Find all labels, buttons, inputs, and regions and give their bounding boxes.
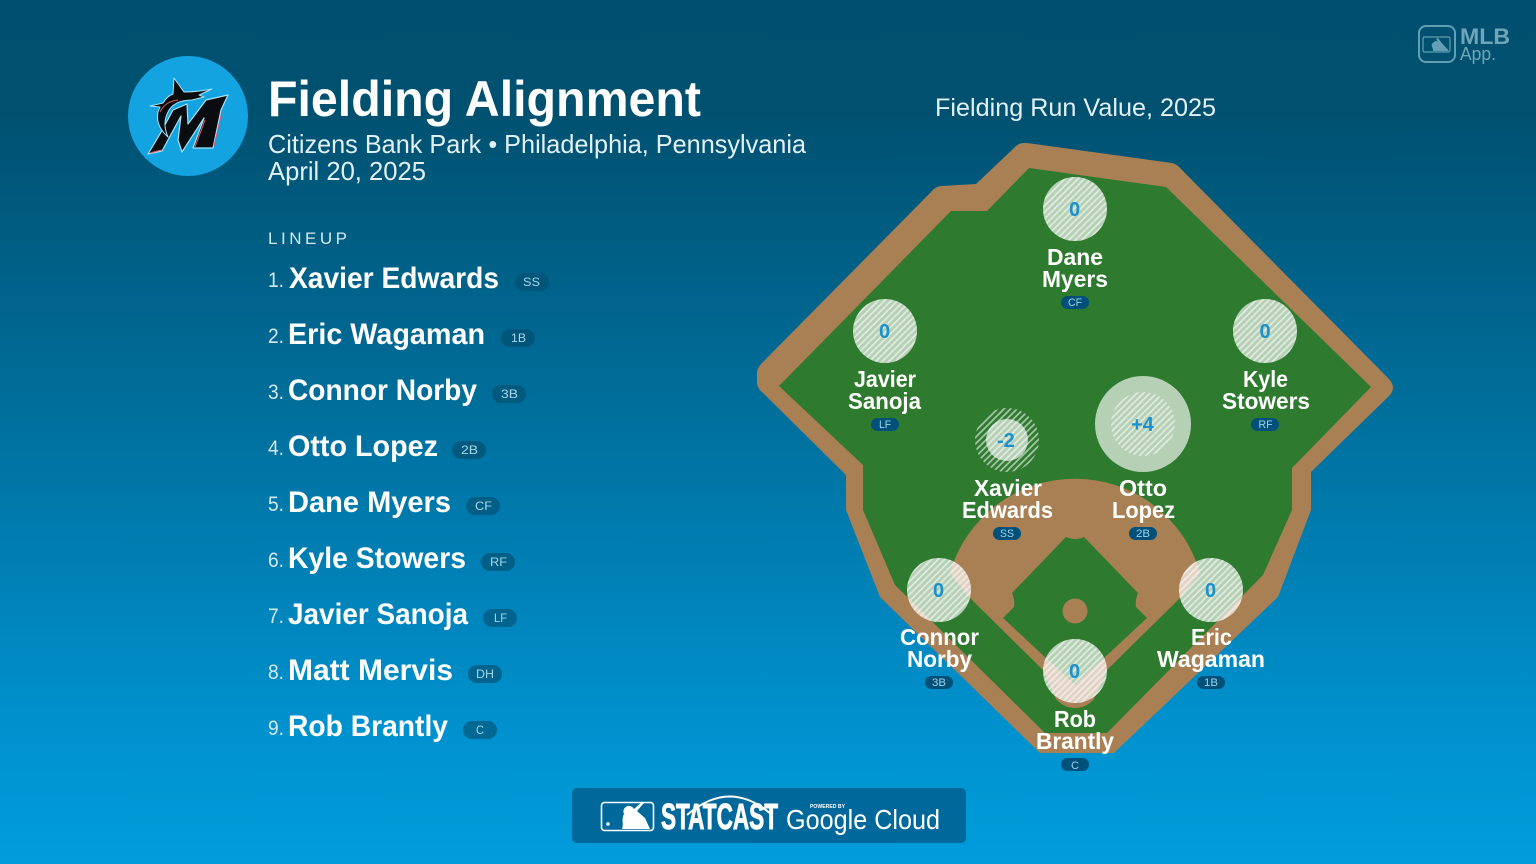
infield grass (1003, 537, 1147, 685)
infield dirt (950, 479, 1200, 708)
lineup 1: 1. (268, 269, 284, 292)
lineup heading: LINEUP (268, 229, 347, 248)
lineup 7: 7. (268, 605, 284, 628)
player: Rob Brantly (1036, 639, 1114, 772)
player: Xavier Edwards: Xavier (974, 475, 1042, 501)
player: Connor Norby (900, 558, 979, 689)
lineup 8: DH (476, 667, 494, 681)
player: Javier Sanoja: 0 (879, 321, 890, 343)
player: Eric Wagaman: 0 (1205, 580, 1216, 602)
player: Javier Sanoja (848, 299, 921, 431)
player: Dane Myers (1042, 177, 1108, 309)
player: Kyle Stowers: 0 (1260, 321, 1271, 343)
team logo (128, 56, 248, 176)
lineup 1: Xavier Edwards (289, 262, 499, 295)
player: Connor Norby: 3B (932, 677, 946, 689)
player: Eric Wagaman: 1B (1204, 677, 1218, 689)
player: Otto Lopez (1095, 376, 1191, 540)
field diagram (757, 143, 1393, 772)
lineup 9: C (476, 723, 484, 737)
lineup 9: 9. (268, 717, 284, 740)
player: Rob Brantly: 0 (1069, 661, 1080, 683)
lineup 8: 8. (268, 661, 284, 684)
lineup 9: Rob Brantly (288, 710, 448, 743)
lineup 3: 3. (268, 381, 284, 404)
mlb app logo: App. (1460, 44, 1496, 64)
player: Eric Wagaman: Eric (1191, 624, 1232, 650)
lineup 4: 2B (461, 443, 478, 457)
lineup list (268, 229, 549, 743)
lineup 2: 1B (511, 331, 526, 345)
lineup 5: Dane Myers (288, 486, 451, 519)
player: Kyle Stowers: Stowers (1222, 388, 1310, 414)
lineup 2: 2. (268, 325, 284, 348)
player: Dane Myers: Myers (1042, 266, 1108, 292)
venue: Citizens Bank Park • Philadelphia, Pennsylvania (268, 129, 807, 159)
icon: mlb logo (602, 802, 654, 830)
powered by: POWERED BY (810, 804, 846, 810)
player: Otto Lopez: 2B (1136, 528, 1150, 540)
lineup 6: Kyle Stowers (288, 542, 466, 575)
lineup 4: Otto Lopez (288, 430, 438, 463)
lineup 4: 4. (268, 437, 284, 460)
player: Kyle Stowers (1222, 299, 1310, 431)
pitcher's mound (1062, 598, 1088, 624)
chart title: Fielding Run Value, 2025 (935, 94, 1216, 122)
lineup 3: 3B (501, 387, 518, 401)
player: Eric Wagaman (1157, 558, 1265, 689)
lineup 7: LF (494, 611, 507, 625)
lineup 2: Eric Wagaman (288, 318, 485, 351)
date: April 20, 2025 (268, 156, 426, 186)
player: Otto Lopez: Lopez (1112, 497, 1175, 523)
statcast badge (572, 788, 966, 843)
wordmark arc (687, 796, 772, 815)
player: Xavier Edwards (962, 408, 1053, 540)
player: Xavier Edwards: SS (1000, 528, 1014, 540)
player: Otto Lopez: +4 (1131, 414, 1155, 436)
outfield grass (779, 168, 1371, 733)
title: Fielding Alignment (268, 71, 701, 127)
lineup 8: Matt Mervis (288, 654, 453, 687)
player: Dane Myers: 0 (1069, 199, 1080, 221)
header (128, 56, 807, 186)
player: Connor Norby: 0 (933, 580, 944, 602)
player: Dane Myers: Dane (1047, 244, 1103, 270)
lineup 7: Javier Sanoja (288, 598, 468, 631)
lineup 6: 6. (268, 549, 284, 572)
statcast wordmark: STATCAST (661, 796, 778, 837)
player: Dane Myers: CF (1068, 297, 1082, 309)
lineup 5: CF (475, 499, 492, 513)
lineup 3: Connor Norby (288, 374, 477, 407)
google cloud: Google Cloud (786, 804, 940, 835)
player: Otto Lopez: Otto (1119, 475, 1167, 501)
player: Eric Wagaman: Wagaman (1157, 646, 1265, 672)
player: Connor Norby: Connor (900, 624, 979, 650)
player: Xavier Edwards: -2 (997, 430, 1015, 452)
player: Kyle Stowers: RF (1258, 419, 1273, 431)
player: Kyle Stowers: Kyle (1243, 366, 1288, 392)
player: Connor Norby: Norby (907, 646, 972, 672)
mlb app logo (1419, 24, 1510, 64)
warning track (757, 143, 1393, 753)
lineup 1: SS (523, 275, 540, 289)
player: Rob Brantly: Brantly (1036, 728, 1114, 754)
player: Rob Brantly: C (1071, 760, 1079, 772)
mlb app logo: MLB (1460, 24, 1510, 49)
lineup 5: 5. (268, 493, 284, 516)
lineup 6: RF (490, 555, 507, 569)
player: Javier Sanoja: Sanoja (848, 388, 921, 414)
player: Xavier Edwards: Edwards (962, 497, 1053, 523)
player: Rob Brantly: Rob (1054, 706, 1096, 732)
player: Javier Sanoja: Javier (854, 366, 916, 392)
player: Javier Sanoja: LF (879, 419, 891, 431)
